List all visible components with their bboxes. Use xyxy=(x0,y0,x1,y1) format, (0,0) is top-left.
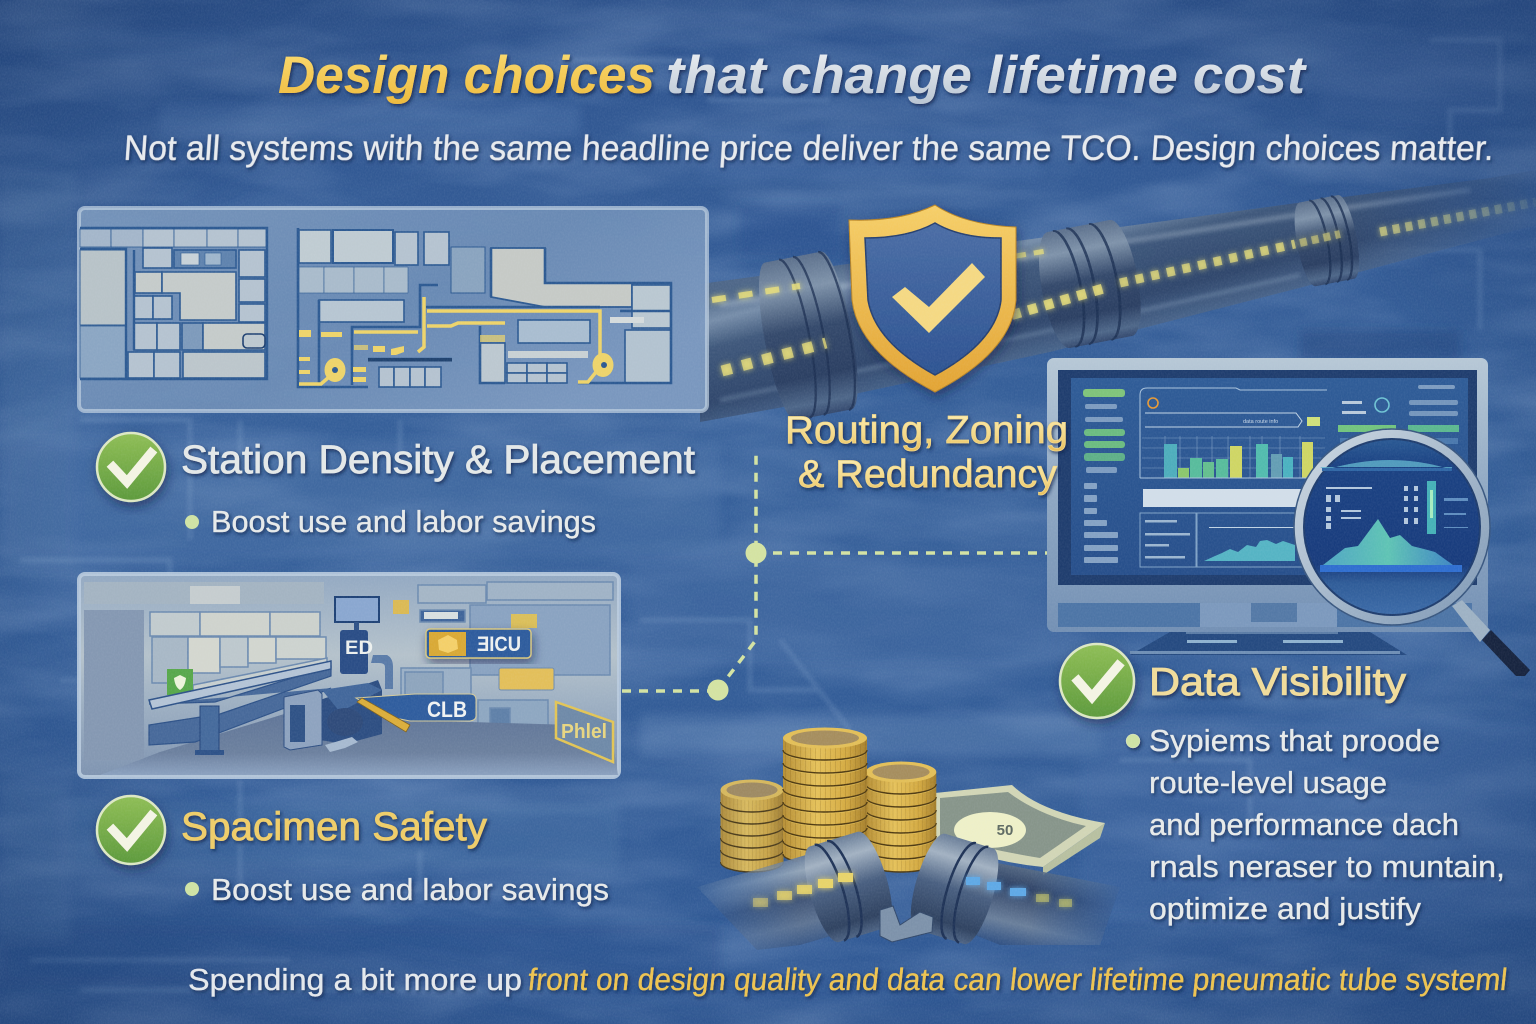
text block: data visibility description: Sypiems that proode xyxy=(1149,723,1440,758)
label ICU: ƎICU xyxy=(477,633,521,656)
floor plan: before xyxy=(80,228,267,379)
monitor base xyxy=(1130,610,1407,655)
footer takeaway: Spending a bit more up xyxy=(188,962,522,997)
search field xyxy=(1143,489,1303,507)
glowing data dashes in pipe xyxy=(712,202,1536,371)
floor plan: after with routes xyxy=(298,228,671,387)
transport carrier machine xyxy=(284,680,382,752)
heading: specimen safety xyxy=(97,796,487,864)
monitor dashboard xyxy=(1047,358,1530,676)
text block: data visibility description: optimize and justify xyxy=(1149,891,1422,926)
main pneumatic tube pipeline xyxy=(700,170,1536,423)
icon: green check xyxy=(1060,644,1134,718)
text block: data visibility description: rnals neraser to muntain, xyxy=(1149,849,1505,884)
panel: specimen safety scene xyxy=(79,574,619,777)
top right status widgets xyxy=(1338,385,1459,444)
heading: routing, zoning and redundancy: & Redundancy xyxy=(798,453,1058,496)
coin stack left xyxy=(720,780,784,872)
label ICU xyxy=(426,629,531,658)
title: Design choices xyxy=(278,46,655,105)
text block: data visibility description: and performance dach xyxy=(1149,807,1459,842)
label CLB xyxy=(356,694,476,722)
pipe collars xyxy=(750,193,1364,423)
yellow lever arm xyxy=(357,698,410,732)
label CLB: CLB xyxy=(427,697,467,722)
icon: shield with check xyxy=(849,205,1016,392)
coin stack right xyxy=(866,762,936,872)
icon: green check xyxy=(97,796,165,864)
shield tag xyxy=(167,669,193,695)
handle xyxy=(1452,600,1530,676)
bar chart xyxy=(1140,388,1327,478)
footer takeaway: front on design quality and data can lower lifetime pneumatic tube systeml xyxy=(526,962,1509,997)
area chart xyxy=(1197,513,1313,567)
hospital wall xyxy=(84,582,613,760)
text block: data visibility description: route-level usage xyxy=(1149,765,1387,800)
heading: routing, zoning and redundancy: Routing, Zoning xyxy=(785,409,1068,452)
bullet: boost use and labor savings: Boost use and labor savings xyxy=(211,504,596,539)
connector node xyxy=(746,542,766,564)
title text: Station Density & Placement xyxy=(181,438,695,482)
lens contents xyxy=(1320,460,1468,572)
conveyor xyxy=(149,661,331,755)
label sign xyxy=(556,702,613,762)
title: that change lifetime cost xyxy=(666,46,1307,105)
yellow tube routes and stations xyxy=(299,297,614,384)
bullet: boost use and labor savings: Boost use and labor savings xyxy=(211,872,609,907)
title text: Data Visibility xyxy=(1149,661,1407,704)
title text: Spacimen Safety xyxy=(181,805,487,849)
banknotes: 50 xyxy=(997,822,1013,839)
dashed connector lines xyxy=(622,448,1047,691)
connector node xyxy=(708,680,728,700)
subtitle: Not all systems with the same headline price deliver the same TCO. Design choices matter. xyxy=(122,129,1495,168)
monitor and chair xyxy=(335,597,393,689)
coin stack centre xyxy=(783,728,867,864)
heading: station density and placement xyxy=(97,433,695,501)
title xyxy=(278,46,1307,105)
pipe lights xyxy=(753,873,1072,907)
floor xyxy=(100,700,618,775)
pipe section left xyxy=(697,828,900,950)
label sign: Phlel xyxy=(561,721,607,743)
lower left list xyxy=(1140,513,1196,567)
label ED: ED xyxy=(345,638,373,659)
banknotes xyxy=(935,785,1105,875)
heading: routing, zoning and redundancy xyxy=(785,409,1068,496)
panel: station density floor plans xyxy=(79,208,707,411)
sidebar menu xyxy=(1083,389,1125,563)
icon: green check xyxy=(97,433,165,501)
bar chart: data route info xyxy=(1243,419,1278,425)
pipe clamp xyxy=(880,906,933,942)
heading: data visibility xyxy=(1060,644,1407,718)
text block: data visibility description xyxy=(1126,723,1505,926)
illustration: coins, banknotes and pipe xyxy=(697,728,1120,950)
magnifying glass xyxy=(1294,429,1530,676)
pipe section right xyxy=(910,834,1114,945)
